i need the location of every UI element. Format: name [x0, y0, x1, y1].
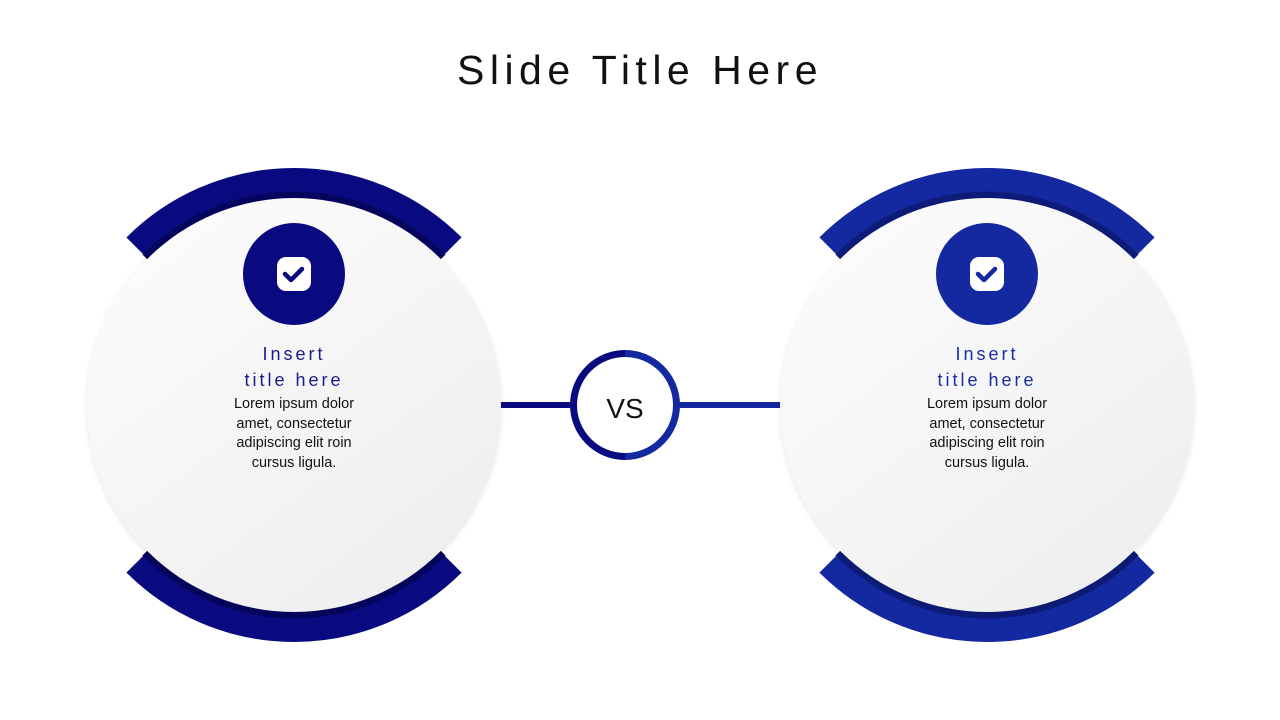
icon: check right — [936, 223, 1038, 325]
text: left: amet, consectetur — [236, 416, 352, 432]
text: left: Lorem ipsum dolor — [234, 396, 354, 412]
vs circle: VS — [606, 393, 644, 424]
text: right — [927, 344, 1047, 470]
connector lines — [498, 402, 782, 408]
title: Slide Title Here — [457, 47, 823, 93]
text: right: amet, consectetur — [929, 416, 1045, 432]
text: left: adipiscing elit roin — [236, 435, 352, 451]
text: right: Insert — [955, 344, 1019, 364]
text: left: Insert — [262, 344, 326, 364]
text: right: adipiscing elit roin — [929, 435, 1045, 451]
text: right: Lorem ipsum dolor — [927, 396, 1047, 412]
panel: left — [87, 186, 501, 624]
panel: right — [780, 186, 1194, 624]
text: left — [234, 344, 354, 470]
text: right: cursus ligula. — [945, 454, 1029, 470]
text: right: title here — [937, 370, 1037, 390]
icon: check left — [243, 223, 345, 325]
vs circle — [574, 354, 676, 456]
text: left: title here — [244, 370, 344, 390]
text: left: cursus ligula. — [252, 454, 336, 470]
